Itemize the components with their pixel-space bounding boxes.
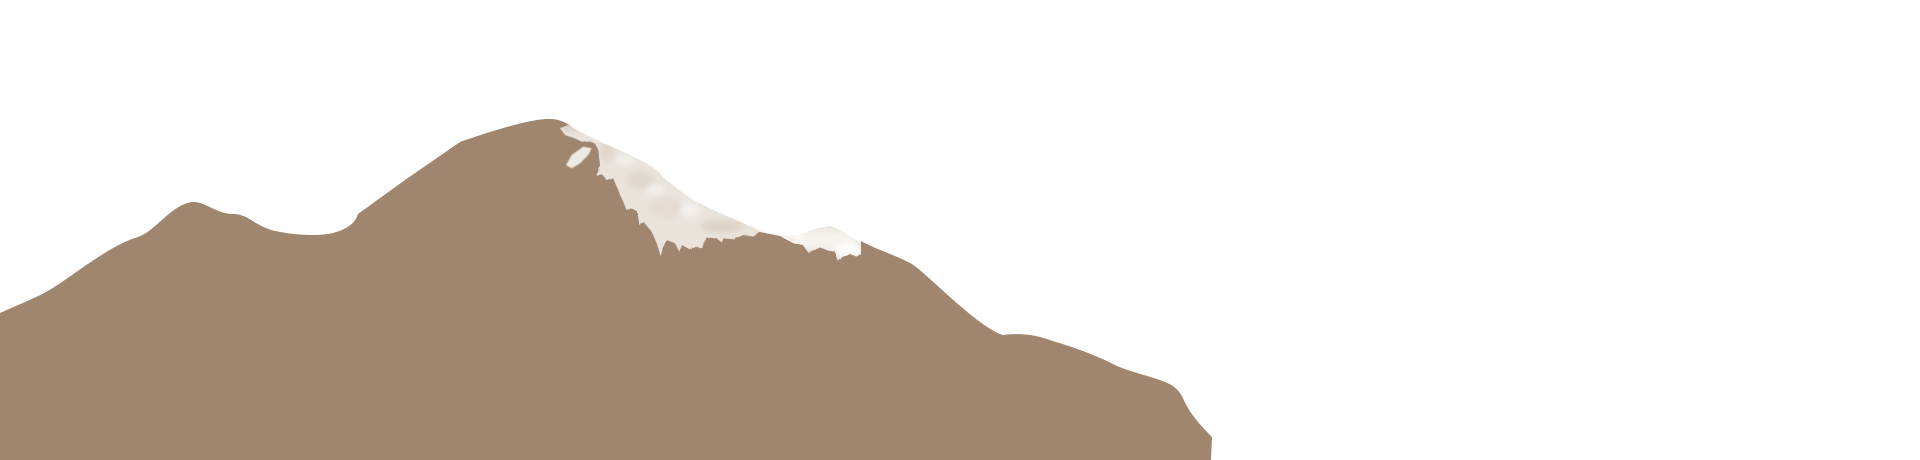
illustration: mountain silhouette with snow cap — [0, 119, 1212, 460]
small bright snow patch — [566, 147, 592, 168]
snow cap — [558, 122, 862, 261]
snow base shape — [560, 125, 861, 261]
mountain silhouette — [0, 119, 1212, 460]
snow shading blotches — [558, 122, 862, 257]
